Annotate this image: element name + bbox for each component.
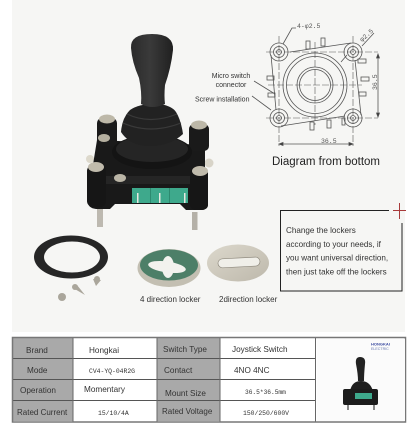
pins — [97, 208, 103, 227]
silver lugs behind — [86, 155, 94, 163]
row: rated: Rated Current — [17, 408, 68, 417]
dimension labels: 36.5 — [372, 74, 379, 90]
row: mode: Contact — [164, 366, 193, 375]
centre lines — [266, 36, 378, 146]
dimension labels: 36.5 — [321, 138, 337, 145]
dimension labels: 4-φ2.5 — [297, 23, 321, 30]
label: 2direction locker: 2direction locker — [219, 295, 278, 304]
2 direction locker — [207, 244, 269, 282]
heading: diagram from bottom: Diagram from bottom — [272, 156, 380, 168]
header cells — [13, 338, 73, 421]
mini joystick — [356, 357, 365, 381]
spec table — [12, 337, 406, 422]
body mass — [88, 140, 208, 210]
row: brand: Switch Type — [163, 345, 207, 354]
row: brand: Hongkai — [89, 346, 119, 355]
callout: change the lockers: you want universal direction, — [286, 254, 388, 262]
callout: change the lockers: then just take off the lockers — [286, 268, 387, 276]
row: mode: CV4-YQ-04R2G — [89, 368, 135, 375]
logo: HONGKAI — [371, 342, 390, 346]
callout: change the lockers: Change the lockers — [286, 226, 356, 235]
4 direction locker — [138, 249, 200, 287]
row: operation — [20, 385, 286, 398]
leaders — [252, 28, 374, 110]
thumbnail — [317, 339, 405, 421]
photo background panel — [12, 0, 405, 332]
dimension labels: φ2.5 — [359, 28, 375, 43]
row: rated: 150/250/600V — [243, 410, 289, 417]
green microswitch — [132, 188, 188, 203]
row: rated: Rated Voltage — [162, 407, 213, 416]
corner holes — [270, 43, 288, 61]
label: micro switch: Micro switch — [212, 73, 250, 80]
terminals — [306, 41, 310, 49]
row: mode — [27, 366, 270, 375]
row: brand: Joystick Switch — [232, 345, 288, 354]
centre rings — [283, 53, 347, 117]
callout: change the lockers: according to your needs, if — [286, 240, 382, 249]
row: operation: Momentary — [84, 385, 126, 394]
plate front edge — [100, 176, 192, 184]
label: 4 direction locker: 4 direction locker — [140, 295, 201, 304]
label: connector: connector — [216, 82, 247, 89]
row: rated — [17, 407, 289, 417]
row: brand — [26, 345, 288, 355]
row: mode: 4NO 4NC — [234, 366, 270, 375]
row: mode: Mode — [27, 366, 48, 375]
corner posts — [97, 118, 117, 146]
row: brand: Brand — [26, 346, 48, 355]
dimension labels — [297, 23, 379, 145]
row: operation: 36.5*36.5mm — [245, 389, 286, 396]
row: rated: 15/10/4A — [98, 410, 129, 417]
label: screw installation: Screw installation — [195, 96, 250, 104]
body outline — [271, 43, 361, 126]
screws — [58, 276, 101, 301]
row: operation: Mount Size — [165, 389, 206, 398]
black ring — [34, 236, 108, 278]
joystick photo — [86, 34, 214, 230]
screws — [99, 114, 115, 124]
boot — [112, 135, 192, 169]
dimension lines — [279, 54, 378, 144]
icon: red plus — [393, 203, 406, 219]
diagram from bottom — [252, 28, 380, 146]
callout: change the lockers — [280, 203, 406, 291]
handle — [131, 34, 173, 107]
thumbnail: ELECTRIC — [371, 347, 389, 351]
row: operation: Operation — [20, 386, 56, 395]
